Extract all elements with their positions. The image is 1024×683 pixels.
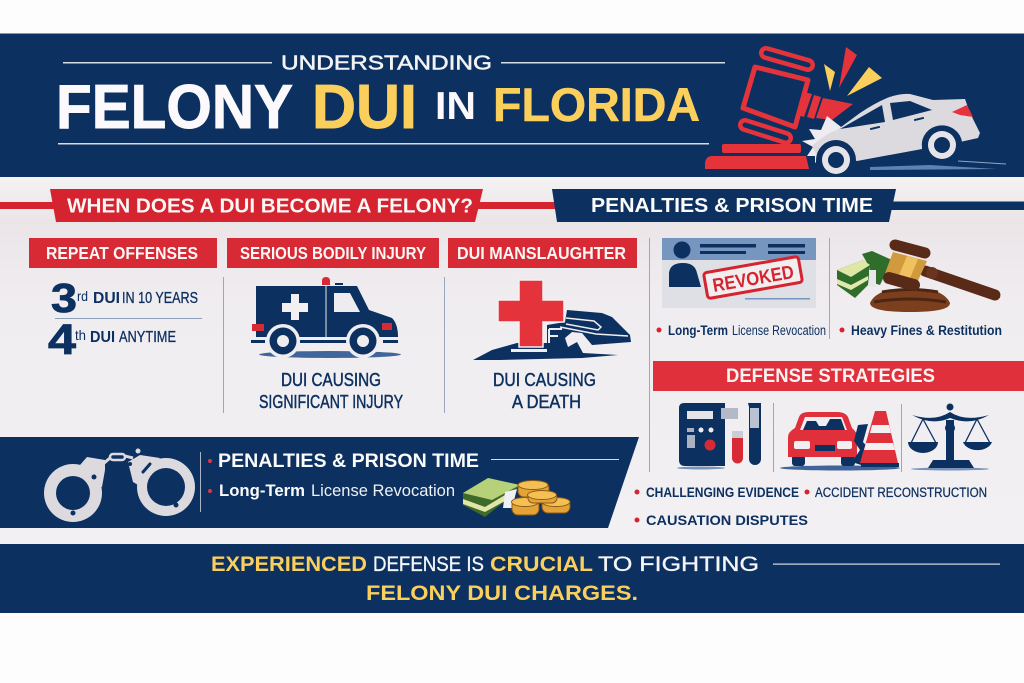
caption: DUI CAUSING [281, 370, 381, 390]
caption [493, 370, 596, 412]
panel: DUI manslaughter [448, 238, 637, 412]
closing message: DEFENSE IS [373, 553, 484, 576]
icon: gavel striking car [705, 47, 1006, 174]
third DUI rule: 3 [51, 275, 77, 321]
icon: revoked license [662, 238, 816, 308]
title [56, 73, 700, 142]
icon: breathalyzer and blood test [677, 403, 761, 470]
fourth DUI rule: DUI [90, 329, 115, 346]
list: defense items [634, 485, 987, 528]
title: DUI [312, 73, 417, 142]
closing message: FELONY DUI CHARGES. [366, 582, 638, 605]
icon: gavel and money [837, 245, 995, 312]
third DUI rule: DUI [93, 290, 120, 307]
caption: SIGNIFICANT INJURY [259, 392, 403, 412]
fourth DUI rule [48, 316, 176, 364]
fourth DUI rule: th [75, 327, 86, 343]
panel: defense strategies [634, 361, 1024, 528]
panel: fines and restitution: Heavy Fines & Restitution [851, 323, 1002, 338]
third DUI rule: IN 10 YEARS [122, 290, 198, 307]
panel: serious bodily injury: SERIOUS BODILY INJURY [240, 243, 426, 263]
panel: penalties strip [0, 437, 639, 528]
heading: penalties and prison time: PENALTIES & PRISON TIME [591, 195, 873, 217]
panel: license revocation: Long-Term [668, 323, 728, 338]
third DUI rule [51, 275, 198, 321]
icon: scales of justice [908, 404, 992, 470]
closing message: EXPERIENCED [211, 553, 367, 576]
panel: penalties strip: Long-Term [219, 481, 305, 500]
closing message: CRUCIAL [490, 553, 593, 576]
heading: penalties and prison time [552, 189, 1024, 222]
icon: red cross over fallen figure [473, 280, 631, 360]
icon: ambulance [251, 277, 401, 358]
footer band [0, 544, 1024, 613]
list: defense items: ACCIDENT RECONSTRUCTION [815, 485, 987, 500]
icon: crashed car and cone [780, 411, 900, 470]
title: FELONY [56, 73, 293, 142]
panel: license revocation: License Revocation [732, 323, 826, 338]
panel: penalties strip: PENALTIES & PRISON TIME [218, 450, 479, 472]
panel: serious bodily injury [227, 238, 439, 412]
panel: penalties strip: License Revocation [311, 481, 455, 500]
panel: fines and restitution [837, 245, 1002, 338]
panel: defense strategies: DEFENSE STRATEGIES [726, 365, 935, 387]
closing message [211, 553, 759, 605]
icon: revoked license: REVOKED [711, 262, 796, 297]
list: defense items: CAUSATION DISPUTES [646, 513, 808, 528]
icon: cash and coins [463, 478, 570, 517]
list: defense items: CHALLENGING EVIDENCE [646, 485, 799, 500]
panel: DUI manslaughter: DUI MANSLAUGHTER [457, 243, 626, 263]
heading: when does a DUI become a felony [0, 189, 555, 222]
kicker: understanding: UNDERSTANDING [281, 52, 492, 74]
fourth DUI rule: 4 [48, 316, 76, 364]
caption: A DEATH [512, 392, 581, 412]
panel: license revocation [656, 238, 826, 338]
closing message: TO FIGHTING [598, 553, 759, 576]
fourth DUI rule: ANYTIME [119, 329, 176, 346]
header band [0, 34, 1024, 177]
panel: repeat offenses [29, 238, 217, 364]
title: IN [435, 85, 476, 128]
caption: DUI CAUSING [493, 370, 596, 390]
caption [259, 370, 403, 412]
third DUI rule: rd [77, 288, 88, 304]
icon: handcuffs [44, 448, 195, 522]
title: FLORIDA [493, 78, 700, 131]
heading: when does a DUI become a felony: WHEN DOES A DUI BECOME A FELONY? [67, 194, 473, 218]
panel: repeat offenses: REPEAT OFFENSES [46, 243, 198, 263]
